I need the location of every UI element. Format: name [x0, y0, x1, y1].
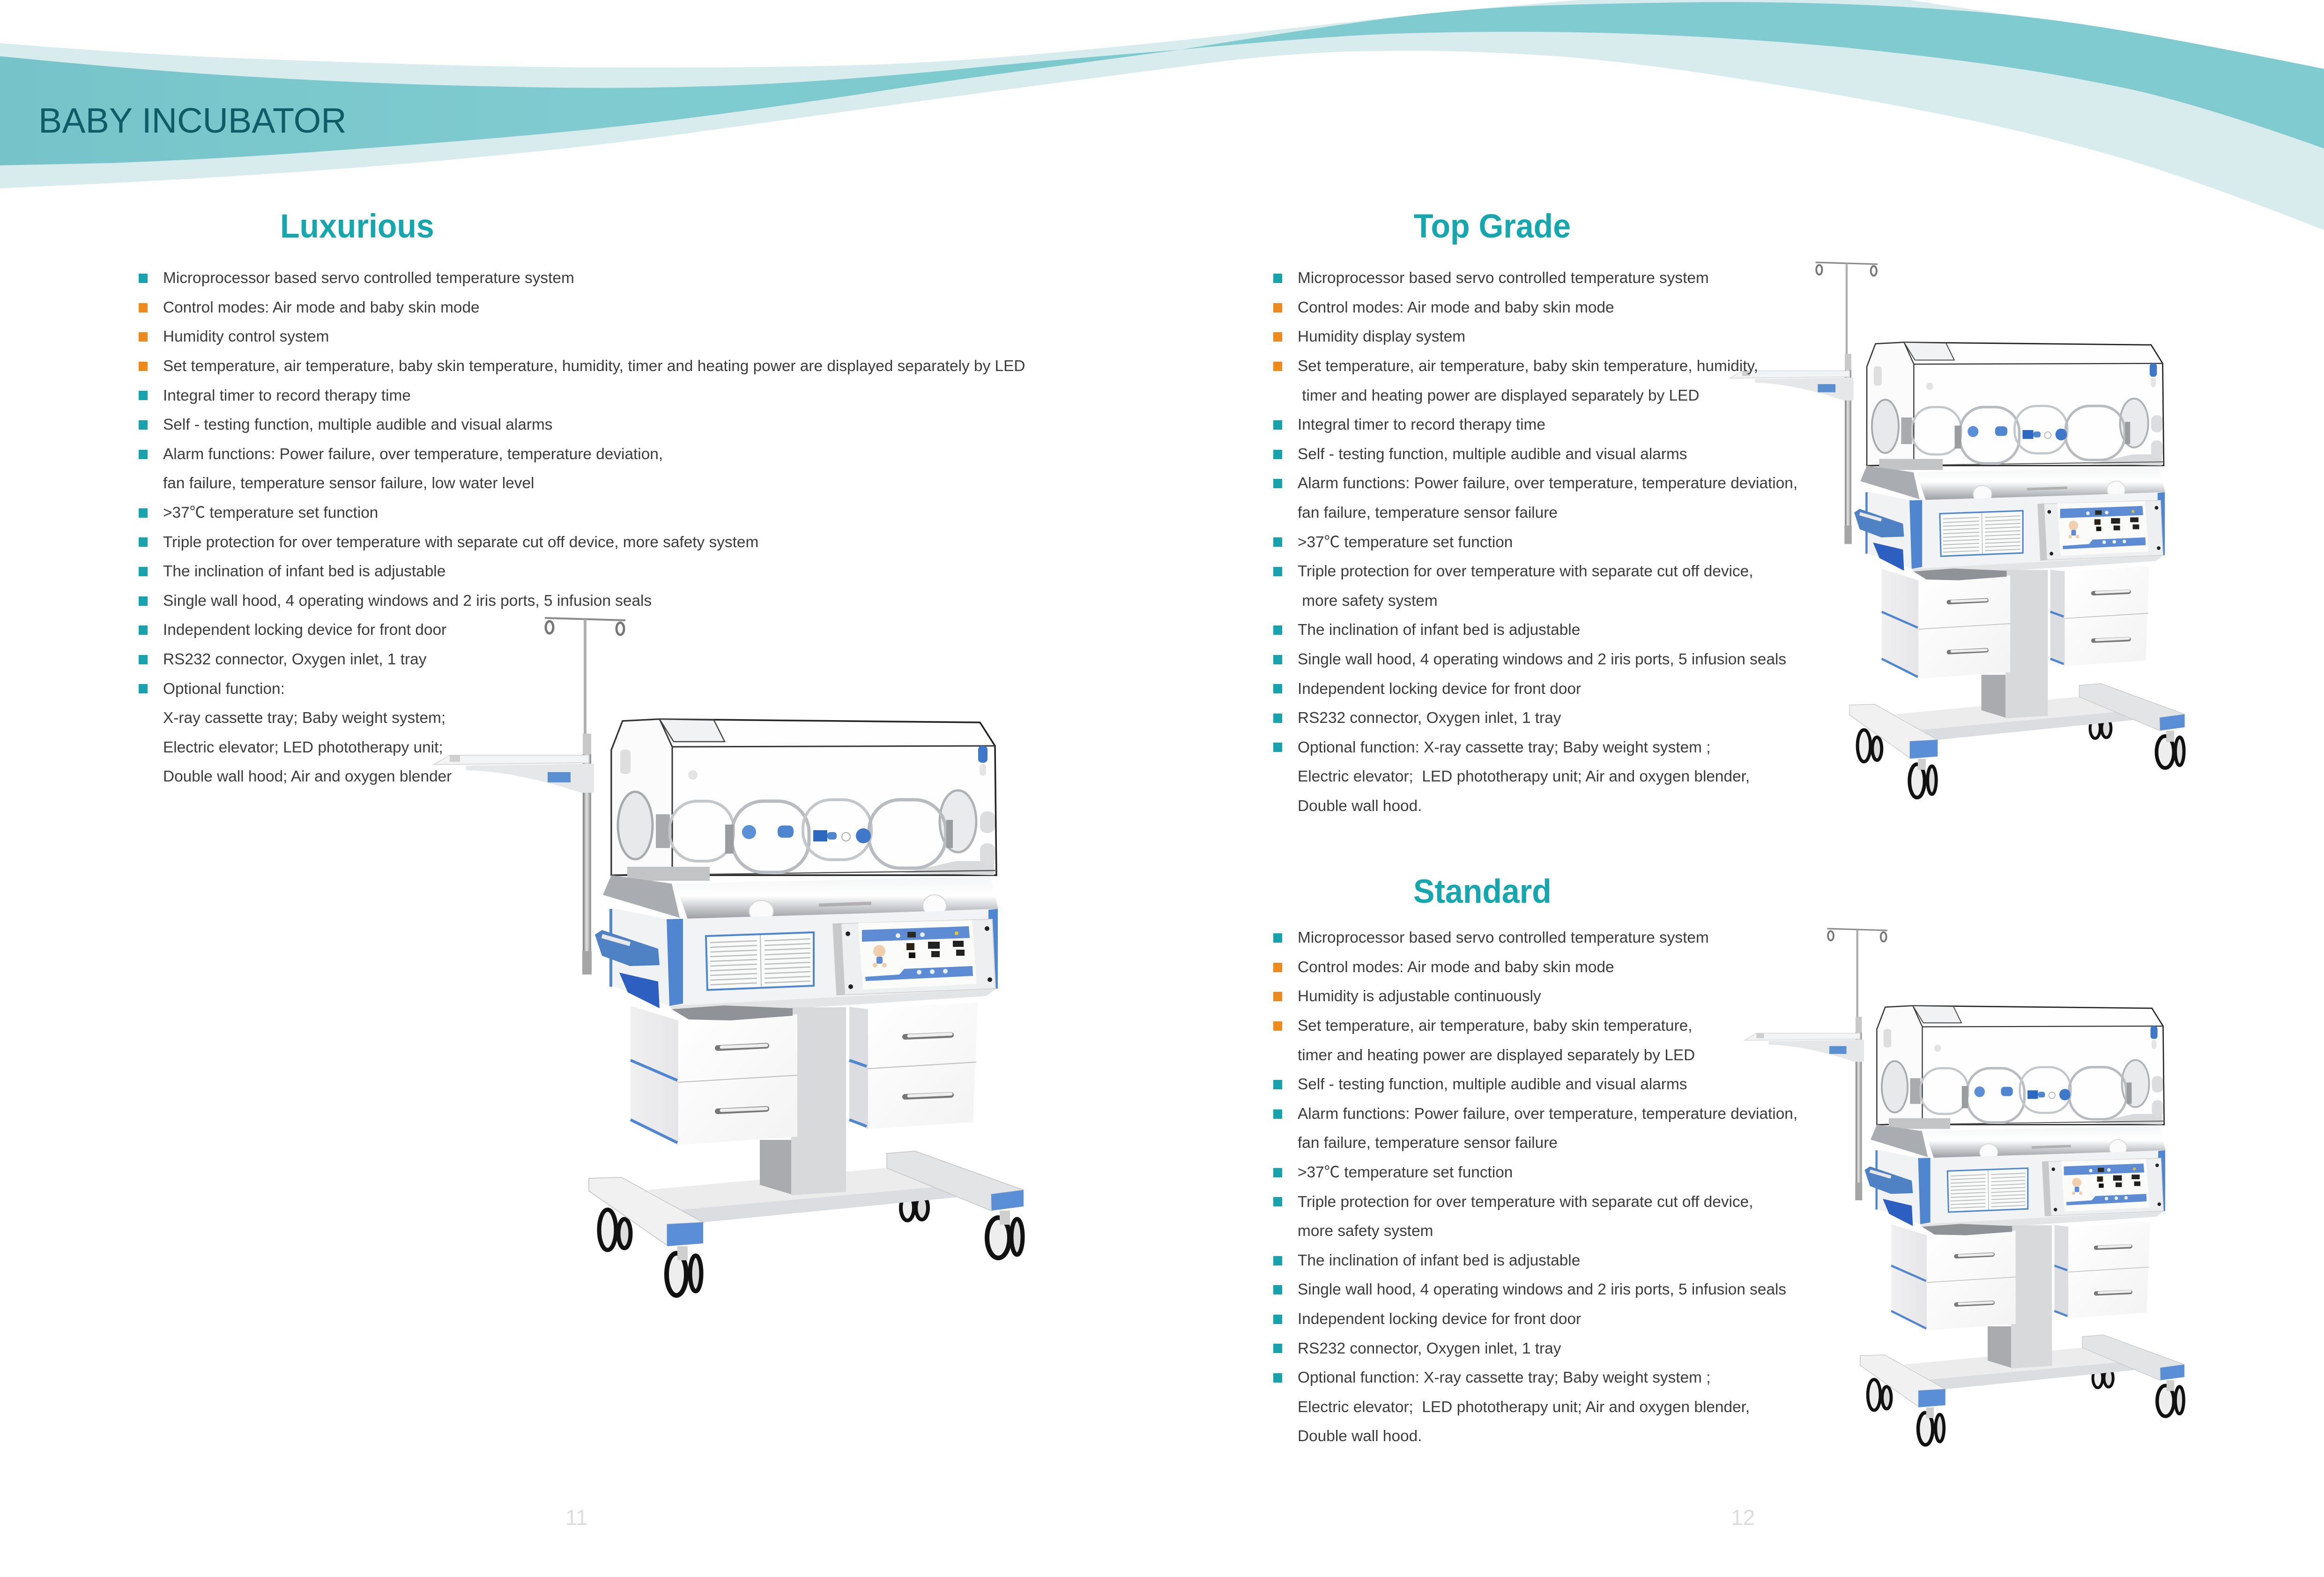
- feature list: luxurious: [139, 264, 1025, 792]
- operating windows: [670, 801, 734, 861]
- feature list: luxurious: The inclination of infant bed is adjustable: [163, 563, 445, 580]
- rail latches: [749, 895, 946, 922]
- feature list: top grade: fan failure, temperature sensor failure: [1298, 504, 1558, 521]
- side tray: [434, 755, 594, 793]
- feature list: top grade: Independent locking device for front door: [1298, 680, 1581, 697]
- white top rail: [676, 877, 998, 919]
- feature list: top grade: Optional function: X-ray cassette tray; Baby weight system ;: [1298, 739, 1711, 756]
- feature list: standard: RS232 connector, Oxygen inlet, 1 tray: [1298, 1340, 1561, 1357]
- header wave: light band: [0, 0, 2324, 230]
- feature list: top grade: Self - testing function, multiple audible and visual alarms: [1298, 446, 1687, 463]
- front wheels: [667, 1211, 1023, 1295]
- feature list: luxurious: Electric elevator; LED phototherapy unit;: [163, 739, 443, 756]
- feature list: luxurious: Self - testing function, multiple audible and visual alarms: [163, 416, 553, 433]
- feature list: luxurious: >37℃ temperature set function: [163, 504, 378, 521]
- feature list: top grade: Single wall hood, 4 operating windows and 2 iris ports, 5 infusion seals: [1298, 651, 1786, 668]
- feature list: standard: Set temperature, air temperature, baby skin temperature,: [1298, 1017, 1693, 1034]
- control panel: [833, 919, 995, 995]
- feature list: luxurious: Single wall hood, 4 operating windows and 2 iris ports, 5 infusion seals: [163, 592, 652, 610]
- product image: luxurious incubator: [434, 618, 1024, 1295]
- panel: luxurious features: [139, 206, 1029, 787]
- feature list: luxurious: Set temperature, air temperature, baby skin temperature, humidity, timer and heating power are displayed separately by LED: [163, 357, 1025, 375]
- header wave: dark left band: [0, 50, 1181, 165]
- page number right: 12: [1731, 1505, 1755, 1530]
- feature list: top grade: Double wall hood.: [1298, 797, 1422, 815]
- feature list: standard: Triple protection for over temperature with separate cut off device,: [1298, 1193, 1753, 1211]
- feature list: top grade: Set temperature, air temperature, baby skin temperature, humidity,: [1298, 357, 1758, 375]
- feature list: luxurious: RS232 connector, Oxygen inlet, 1 tray: [163, 651, 426, 668]
- feature list: standard: timer and heating power are displayed separately by LED: [1298, 1047, 1695, 1064]
- feature list: standard: [1273, 923, 1797, 1451]
- feature list: standard: Humidity is adjustable continuously: [1298, 988, 1541, 1005]
- feature list: standard: Alarm functions: Power failure, over temperature, temperature deviation,: [1298, 1105, 1797, 1123]
- feature list: luxurious: Alarm functions: Power failure, over temperature, temperature deviation,: [163, 446, 663, 463]
- feature list: standard: fan failure, temperature sensor failure: [1298, 1134, 1558, 1152]
- u-shaped base: [589, 1151, 1024, 1246]
- feature list: standard: Microprocessor based servo controlled temperature system: [1298, 929, 1709, 946]
- feature list: top grade: timer and heating power are displayed separately by LED: [1302, 387, 1700, 404]
- feature list: top grade: Electric elevator; LED phototherapy unit; Air and oxygen blender,: [1298, 768, 1750, 785]
- feature list: standard: The inclination of infant bed is adjustable: [1298, 1252, 1580, 1269]
- feature list: top grade: Control modes: Air mode and baby skin mode: [1298, 299, 1614, 316]
- left drawers: [631, 1006, 797, 1145]
- feature list: luxurious: fan failure, temperature sensor failure, low water level: [163, 475, 534, 492]
- feature list: luxurious: X-ray cassette tray; Baby weight system;: [163, 709, 445, 727]
- acrylic hood: [611, 719, 996, 881]
- feature list: luxurious: Microprocessor based servo controlled temperature system: [163, 269, 574, 287]
- feature list: luxurious: Double wall hood; Air and oxygen blender: [163, 768, 452, 785]
- right drawers: [849, 1003, 978, 1129]
- feature list: top grade: Microprocessor based servo controlled temperature system: [1298, 269, 1709, 287]
- gray rail end: [603, 875, 680, 918]
- feature list: standard: Self - testing function, multiple audible and visual alarms: [1298, 1076, 1687, 1093]
- feature list: standard: Control modes: Air mode and baby skin mode: [1298, 959, 1614, 976]
- page title: BABY INCUBATOR: [38, 101, 347, 140]
- heading: top grade: Top Grade: [1414, 208, 1571, 245]
- feature list: standard: Electric elevator; LED phototherapy unit; Air and oxygen blender,: [1298, 1398, 1750, 1416]
- feature list: luxurious: Triple protection for over temperature with separate cut off device, more safety system: [163, 534, 758, 551]
- feature list: top grade: RS232 connector, Oxygen inlet, 1 tray: [1298, 709, 1561, 727]
- heading: standard: Standard: [1413, 873, 1552, 910]
- feature list: top grade: >37℃ temperature set function: [1298, 534, 1513, 551]
- feature list: top grade: more safety system: [1302, 592, 1438, 610]
- iv pole: [545, 618, 625, 974]
- base plate: [647, 1168, 958, 1210]
- feature list: standard: >37℃ temperature set function: [1298, 1164, 1513, 1181]
- column: [760, 1007, 846, 1195]
- feature list: top grade: [1273, 264, 1797, 821]
- under-carriage shelf: [672, 1005, 793, 1020]
- header wave: dark right band: [1181, 2, 2324, 149]
- feature list: luxurious: Humidity control system: [163, 328, 329, 345]
- panel: top grade features: [1273, 206, 1803, 820]
- feature list: top grade: Triple protection for over temperature with separate cut off device,: [1298, 563, 1753, 580]
- feature list: luxurious: Independent locking device for front door: [163, 621, 446, 639]
- panel: standard features: [1273, 871, 1803, 1452]
- baby illustration: [873, 945, 887, 967]
- feature list: standard: Single wall hood, 4 operating windows and 2 iris ports, 5 infusion seals: [1298, 1281, 1786, 1298]
- feature list: top grade: Integral timer to record therapy time: [1298, 416, 1545, 433]
- feature list: standard: Optional function: X-ray cassette tray; Baby weight system ;: [1298, 1369, 1711, 1386]
- feature list: standard: more safety system: [1298, 1222, 1433, 1240]
- page number left: 11: [565, 1505, 588, 1530]
- feature list: top grade: The inclination of infant bed is adjustable: [1298, 621, 1580, 639]
- product image: standard incubator: [1745, 929, 2184, 1445]
- feature list: top grade: Alarm functions: Power failure, over temperature, temperature deviation,: [1298, 475, 1797, 492]
- feature list: luxurious: Control modes: Air mode and baby skin mode: [163, 299, 480, 316]
- feature list: standard: Double wall hood.: [1298, 1428, 1422, 1445]
- body side panel: [595, 908, 669, 1008]
- rear wheels: [599, 1195, 928, 1250]
- feature list: luxurious: Optional function:: [163, 680, 285, 697]
- side access ports: [618, 792, 653, 859]
- blue infusion seals: [742, 825, 756, 839]
- feature list: standard: Independent locking device for front door: [1298, 1310, 1581, 1328]
- feature list: top grade: Humidity display system: [1298, 328, 1465, 345]
- feature list: luxurious: Integral timer to record therapy time: [163, 387, 411, 404]
- heading: luxurious: Luxurious: [280, 208, 434, 245]
- product image: top grade incubator: [1730, 262, 2185, 797]
- body front panel: [667, 909, 998, 1013]
- instruction sticker: [706, 932, 814, 990]
